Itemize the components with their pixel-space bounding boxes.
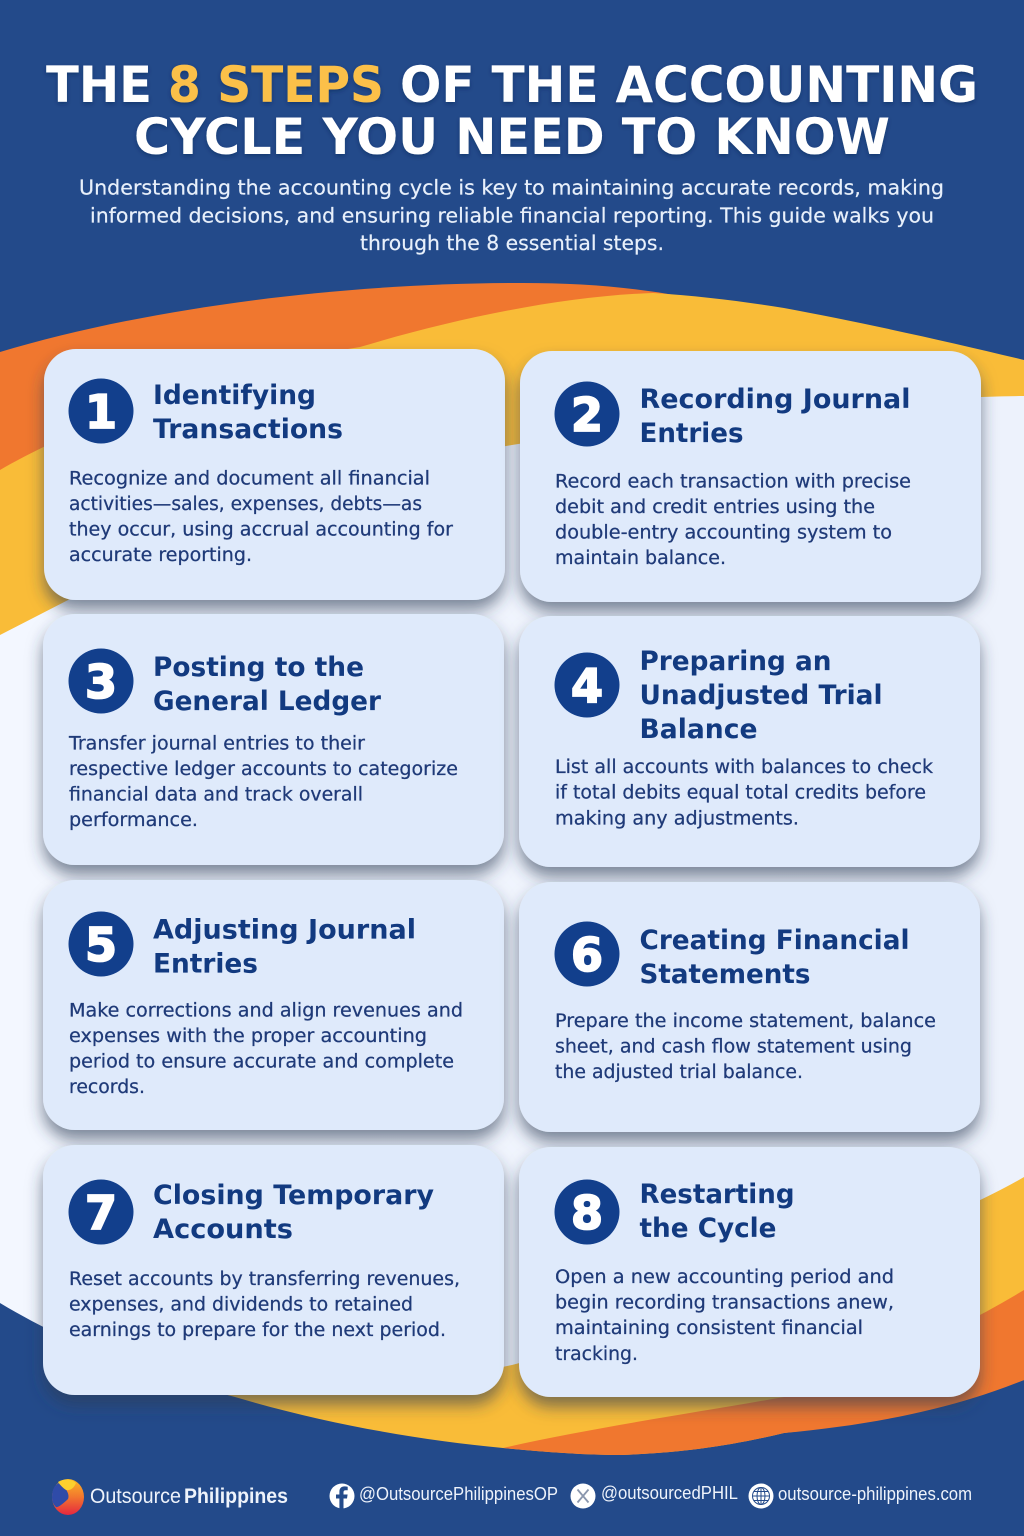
panel: step 5: [43, 880, 504, 1130]
panel: step 8: [519, 1147, 980, 1397]
panel: step 4: Balance: [640, 714, 758, 745]
panel: step 2: debit and credit entries using the: [555, 497, 875, 518]
title: [46, 56, 978, 166]
title: 8 STEPS: [168, 56, 384, 114]
panel: step 5: Make corrections and align revenues and: [69, 1000, 463, 1022]
panel: step 3: respective ledger accounts to categorize: [69, 759, 458, 780]
logo wordmark: Philippines: [184, 1485, 288, 1508]
panel: step 4: if total debits equal total credits before: [555, 782, 926, 804]
icon: Outsource Philippines logo: [52, 1479, 84, 1515]
panel: step 1: 1: [85, 385, 117, 439]
panel: step 7: earnings to prepare for the next period.: [69, 1320, 446, 1341]
subtitle: informed decisions, and ensuring reliable financial reporting. This guide walks you: [90, 204, 934, 228]
panel: step 7: Accounts: [153, 1214, 293, 1245]
panel: step 7: expenses, and dividends to retained: [69, 1294, 413, 1316]
panel: step 5: expenses with the proper accounting: [69, 1026, 427, 1047]
panel: step 6: Creating Financial: [640, 925, 910, 956]
facebook handle: @OutsourcePhilippinesOP: [359, 1484, 558, 1504]
panel: step 4: [519, 616, 980, 867]
panel: step 2: Entries: [640, 418, 744, 449]
panel: step 2: Recording Journal: [640, 384, 910, 415]
subtitle: Understanding the accounting cycle is key to maintaining accurate records, making: [79, 176, 944, 200]
panel: step 6: Statements: [640, 959, 810, 990]
website: outsource-philippines.com: [778, 1484, 972, 1504]
icon: X: [570, 1484, 596, 1508]
panel: step 8: Open a new accounting period and: [555, 1267, 894, 1288]
panel: step 1: they occur, using accrual accounting for: [69, 520, 453, 540]
panel: step 2: [520, 351, 981, 602]
panel: step 5: Entries: [153, 948, 258, 980]
panel: step 2: maintain balance.: [555, 548, 726, 569]
panel: step 1: Identifying: [153, 380, 316, 411]
panel: step 6: sheet, and cash flow statement using: [555, 1036, 912, 1058]
panel: step 1: Recognize and document all financial: [69, 468, 430, 490]
panel: step 2: Record each transaction with precise: [555, 472, 911, 492]
logo wordmark: [90, 1485, 288, 1508]
panel: step 1: [44, 349, 505, 600]
panel: step 8: 8: [571, 1186, 603, 1240]
panel: step 8: Restarting: [640, 1179, 794, 1210]
panel: step 3: financial data and track overall: [69, 784, 363, 806]
panel: step 5: 5: [85, 918, 117, 972]
panel: step 1: activities—sales, expenses, debts—as: [69, 494, 422, 515]
panel: step 1: Transactions: [153, 414, 343, 445]
title: CYCLE YOU NEED TO KNOW: [134, 108, 890, 166]
panel: step 6: Prepare the income statement, balance: [555, 1011, 936, 1032]
panel: step 1: accurate reporting.: [69, 545, 252, 566]
panel: step 3: 3: [85, 655, 117, 709]
panel: step 3: Posting to the: [153, 652, 364, 683]
panel: step 2: double-entry accounting system to: [555, 522, 892, 544]
panel: step 5: Adjusting Journal: [153, 914, 416, 946]
panel: step 4: 4: [571, 659, 603, 713]
panel: step 6: the adjusted trial balance.: [555, 1062, 803, 1083]
panel: step 4: making any adjustments.: [555, 808, 799, 830]
X handle: @outsourcedPHIL: [601, 1483, 738, 1503]
panel: step 8: maintaining consistent financial: [555, 1318, 863, 1339]
panel: step 4: List all accounts with balances to check: [555, 757, 933, 778]
panel: step 5: period to ensure accurate and complete: [69, 1052, 454, 1072]
panel: step 6: [519, 882, 980, 1132]
panel: step 8: begin recording transactions anew,: [555, 1292, 894, 1314]
logo wordmark: Outsource: [90, 1485, 181, 1508]
panel: step 6: 6: [571, 928, 603, 982]
panel: step 7: Closing Temporary: [153, 1180, 434, 1211]
panel: step 7: 7: [85, 1186, 117, 1240]
subtitle: [79, 176, 944, 255]
icon: facebook: [330, 1484, 354, 1508]
panel: step 4: Preparing an: [640, 646, 832, 677]
panel: step 3: General Ledger: [153, 686, 382, 717]
panel: step 3: [43, 614, 504, 865]
panel: step 3: Transfer journal entries to their: [68, 734, 365, 754]
panel: step 2: 2: [571, 388, 603, 442]
panel: step 7: Reset accounts by transferring revenues,: [69, 1269, 460, 1290]
panel: step 4: Unadjusted Trial: [640, 680, 882, 711]
panel: step 7: [43, 1145, 504, 1395]
panel: step 3: performance.: [69, 810, 198, 831]
panel: step 8: tracking.: [555, 1344, 638, 1365]
title: OF THE ACCOUNTING: [400, 56, 978, 114]
panel: step 8: the Cycle: [640, 1213, 776, 1244]
footer: [52, 1479, 972, 1515]
panel: step 5: records.: [69, 1077, 145, 1098]
subtitle: through the 8 essential steps.: [360, 231, 664, 255]
icon: globe: [748, 1484, 774, 1508]
title: THE: [46, 56, 152, 114]
